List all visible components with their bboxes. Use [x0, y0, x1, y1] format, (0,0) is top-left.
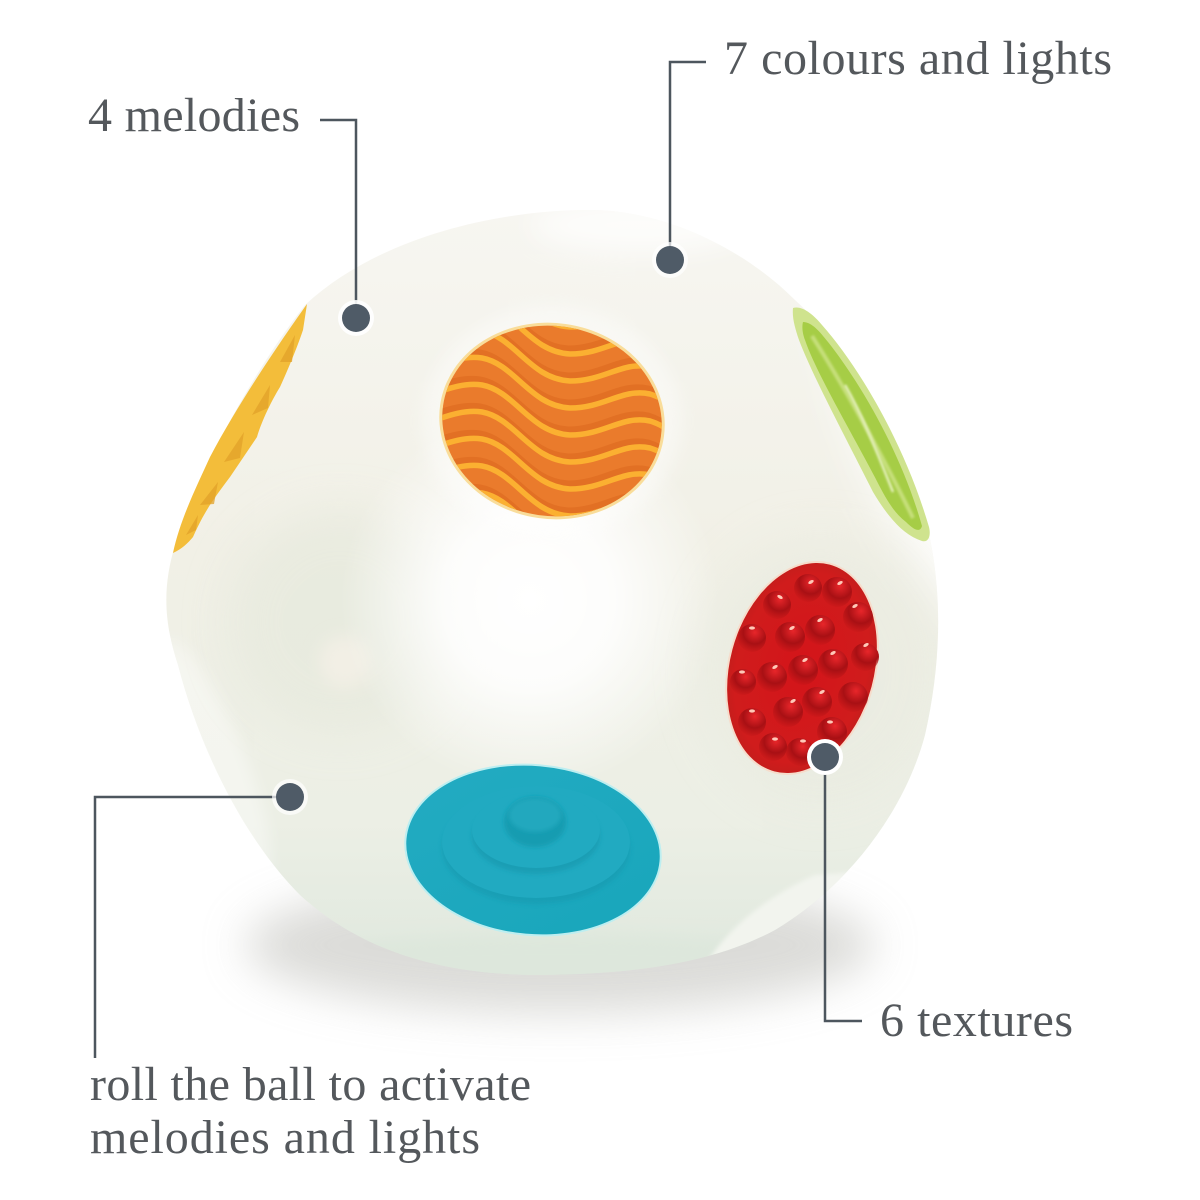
callout: roll the ball	[90, 779, 531, 1164]
texture: green ring	[793, 307, 930, 541]
label: 6 textures: 6 textures	[880, 994, 1073, 1047]
texture: red bumps	[702, 544, 902, 792]
callout: 6 textures	[807, 739, 1073, 1047]
ball shadow	[245, 877, 875, 1013]
texture: yellow panel	[173, 304, 307, 553]
texture: orange waves	[439, 322, 665, 520]
ball	[166, 211, 938, 975]
label: 7 colours and lights: 7 colours and lights	[724, 32, 1112, 85]
callout: 4 melodies	[88, 89, 374, 336]
label: 4 melodies: 4 melodies	[88, 89, 300, 142]
texture: blue rings	[397, 753, 669, 947]
label: roll the ball text: roll the ball to activate	[90, 1058, 531, 1111]
callout: roll the ball: melodies and lights	[90, 1111, 480, 1164]
callout: 7 colours and lights	[652, 32, 1112, 278]
